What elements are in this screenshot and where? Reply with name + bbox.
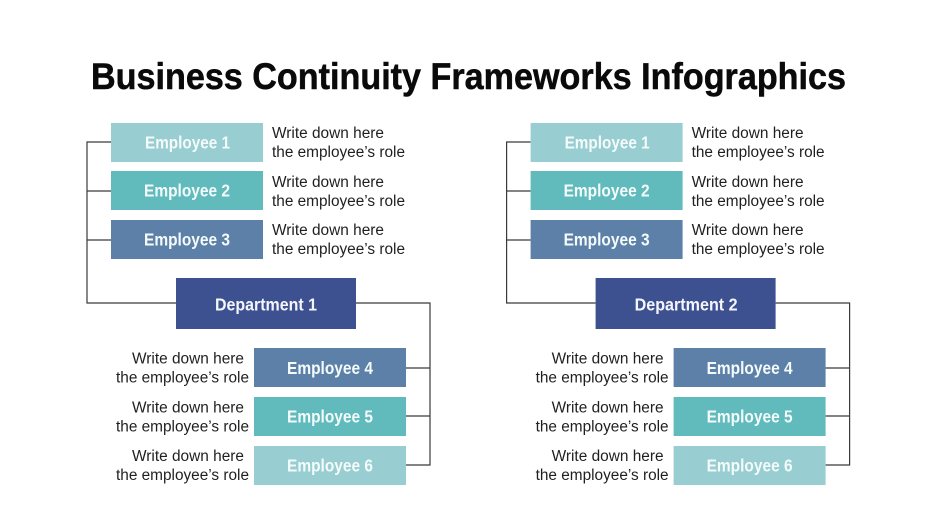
role text: employee 4: Write down here — [132, 350, 244, 368]
connector lines: bottom group — [776, 303, 850, 465]
panel: department 1 org chart — [87, 123, 430, 485]
box: employee 3: Employee 3 — [564, 230, 650, 250]
box: employee 5: Employee 5 — [707, 406, 793, 426]
role text: employee 1: Write down here — [692, 125, 804, 142]
role text: employee 2: Write down here — [272, 174, 384, 191]
box: employee 2 — [531, 171, 683, 210]
box: employee 4: Employee 4 — [707, 358, 793, 378]
box: employee 5 — [674, 397, 826, 436]
box: department 1 — [176, 278, 356, 329]
box: employee 1: Employee 1 — [145, 132, 230, 152]
role text: employee 2: Write down here — [692, 174, 804, 191]
box: employee 5 — [254, 397, 406, 436]
role text: employee 1: the employee’s role — [272, 144, 405, 161]
box: employee 5: Employee 5 — [287, 406, 373, 426]
role text: employee 5 — [536, 400, 669, 436]
role text: employee 3: Write down here — [272, 222, 384, 239]
title: Business Continuity Frameworks Infographics — [91, 56, 846, 97]
box: employee 1 — [531, 123, 683, 162]
box: employee 2: Employee 2 — [144, 180, 230, 200]
role text: employee 6: Write down here — [132, 448, 244, 465]
box: employee 6: Employee 6 — [287, 456, 373, 476]
box: department 2 — [596, 278, 776, 329]
box: employee 6: Employee 6 — [707, 456, 793, 476]
role text: employee 6: Write down here — [552, 448, 664, 465]
role text: employee 4 — [536, 350, 669, 386]
connector lines: top group — [507, 142, 596, 303]
box: employee 4: Employee 4 — [287, 358, 373, 378]
box: employee 3 — [531, 220, 683, 259]
connector lines: bottom group — [356, 303, 430, 465]
role text: employee 5: Write down here — [552, 400, 664, 416]
box: department 1: Department 1 — [215, 294, 317, 314]
box: employee 3 — [111, 220, 263, 259]
box: department 2: Department 2 — [635, 294, 738, 314]
box: employee 6 — [254, 446, 406, 485]
role text: employee 6 — [536, 448, 669, 484]
box: employee 3: Employee 3 — [144, 230, 230, 250]
role text: employee 5 — [116, 400, 249, 436]
box: employee 4 — [674, 348, 826, 387]
role text: employee 1 — [272, 125, 405, 161]
role text: employee 3 — [692, 222, 825, 258]
role text: employee 5: the employee’s role — [116, 418, 249, 436]
role text: employee 4: the employee’s role — [536, 370, 669, 386]
role text: employee 3: the employee’s role — [692, 241, 825, 258]
box: employee 1 — [111, 123, 263, 162]
role text: employee 3: the employee’s role — [272, 241, 405, 258]
role text: employee 3 — [272, 222, 405, 258]
connector lines: top group — [87, 142, 176, 303]
box: employee 6 — [674, 446, 826, 485]
box: employee 2: Employee 2 — [564, 180, 650, 200]
panel: department 2 org chart — [507, 123, 850, 485]
role text: employee 4: Write down here — [552, 350, 664, 368]
role text: employee 5: the employee’s role — [536, 418, 669, 436]
role text: employee 1: the employee’s role — [692, 144, 825, 161]
role text: employee 1 — [692, 125, 825, 161]
role text: employee 5: Write down here — [132, 400, 244, 416]
box: employee 2 — [111, 171, 263, 210]
role text: employee 4: the employee’s role — [116, 370, 249, 386]
role text: employee 2 — [692, 174, 825, 210]
box: employee 4 — [254, 348, 406, 387]
role text: employee 6 — [116, 448, 249, 484]
role text: employee 2: the employee’s role — [692, 193, 825, 210]
box: employee 1: Employee 1 — [565, 132, 650, 152]
role text: employee 3: Write down here — [692, 222, 804, 239]
role text: employee 2 — [272, 174, 405, 210]
role text: employee 4 — [116, 350, 249, 386]
role text: employee 2: the employee’s role — [272, 193, 405, 210]
role text: employee 1: Write down here — [272, 125, 384, 142]
role text: employee 6: the employee’s role — [116, 467, 249, 484]
role text: employee 6: the employee’s role — [536, 467, 669, 484]
